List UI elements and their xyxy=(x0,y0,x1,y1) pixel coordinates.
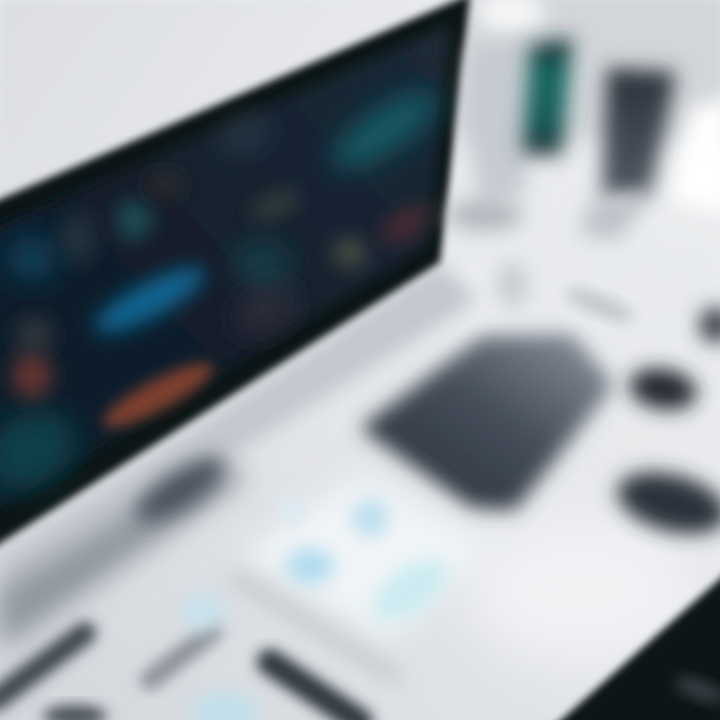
phones on stand xyxy=(447,38,676,328)
small stand post xyxy=(496,261,528,309)
stand shadow xyxy=(447,199,523,231)
device base xyxy=(578,192,650,240)
central tablet pad xyxy=(360,334,614,510)
small item xyxy=(563,282,637,328)
phone teal xyxy=(522,38,572,155)
blue shapes xyxy=(286,549,334,583)
monitor xyxy=(0,0,470,556)
monitor stand and lower bezel xyxy=(0,262,480,650)
paper shadow edge xyxy=(232,575,400,680)
pens and small tools xyxy=(0,632,360,720)
wall behind monitor xyxy=(0,0,470,200)
paper with blue shapes xyxy=(232,475,490,680)
corner highlight xyxy=(672,673,720,707)
monitor screen xyxy=(0,25,450,515)
stand shadow xyxy=(0,465,250,650)
desk highlights xyxy=(420,250,720,660)
stand foot xyxy=(127,447,233,533)
light blue notes xyxy=(183,592,259,720)
mouse and accessories xyxy=(611,307,720,545)
phone grey xyxy=(602,68,676,200)
bright patch at right xyxy=(670,95,720,215)
dark corner xyxy=(550,570,720,720)
monitor frame xyxy=(0,0,470,556)
bright patch at top xyxy=(476,0,544,32)
upper right background xyxy=(460,0,720,215)
device stand xyxy=(465,40,530,205)
screen widgets xyxy=(0,79,448,505)
